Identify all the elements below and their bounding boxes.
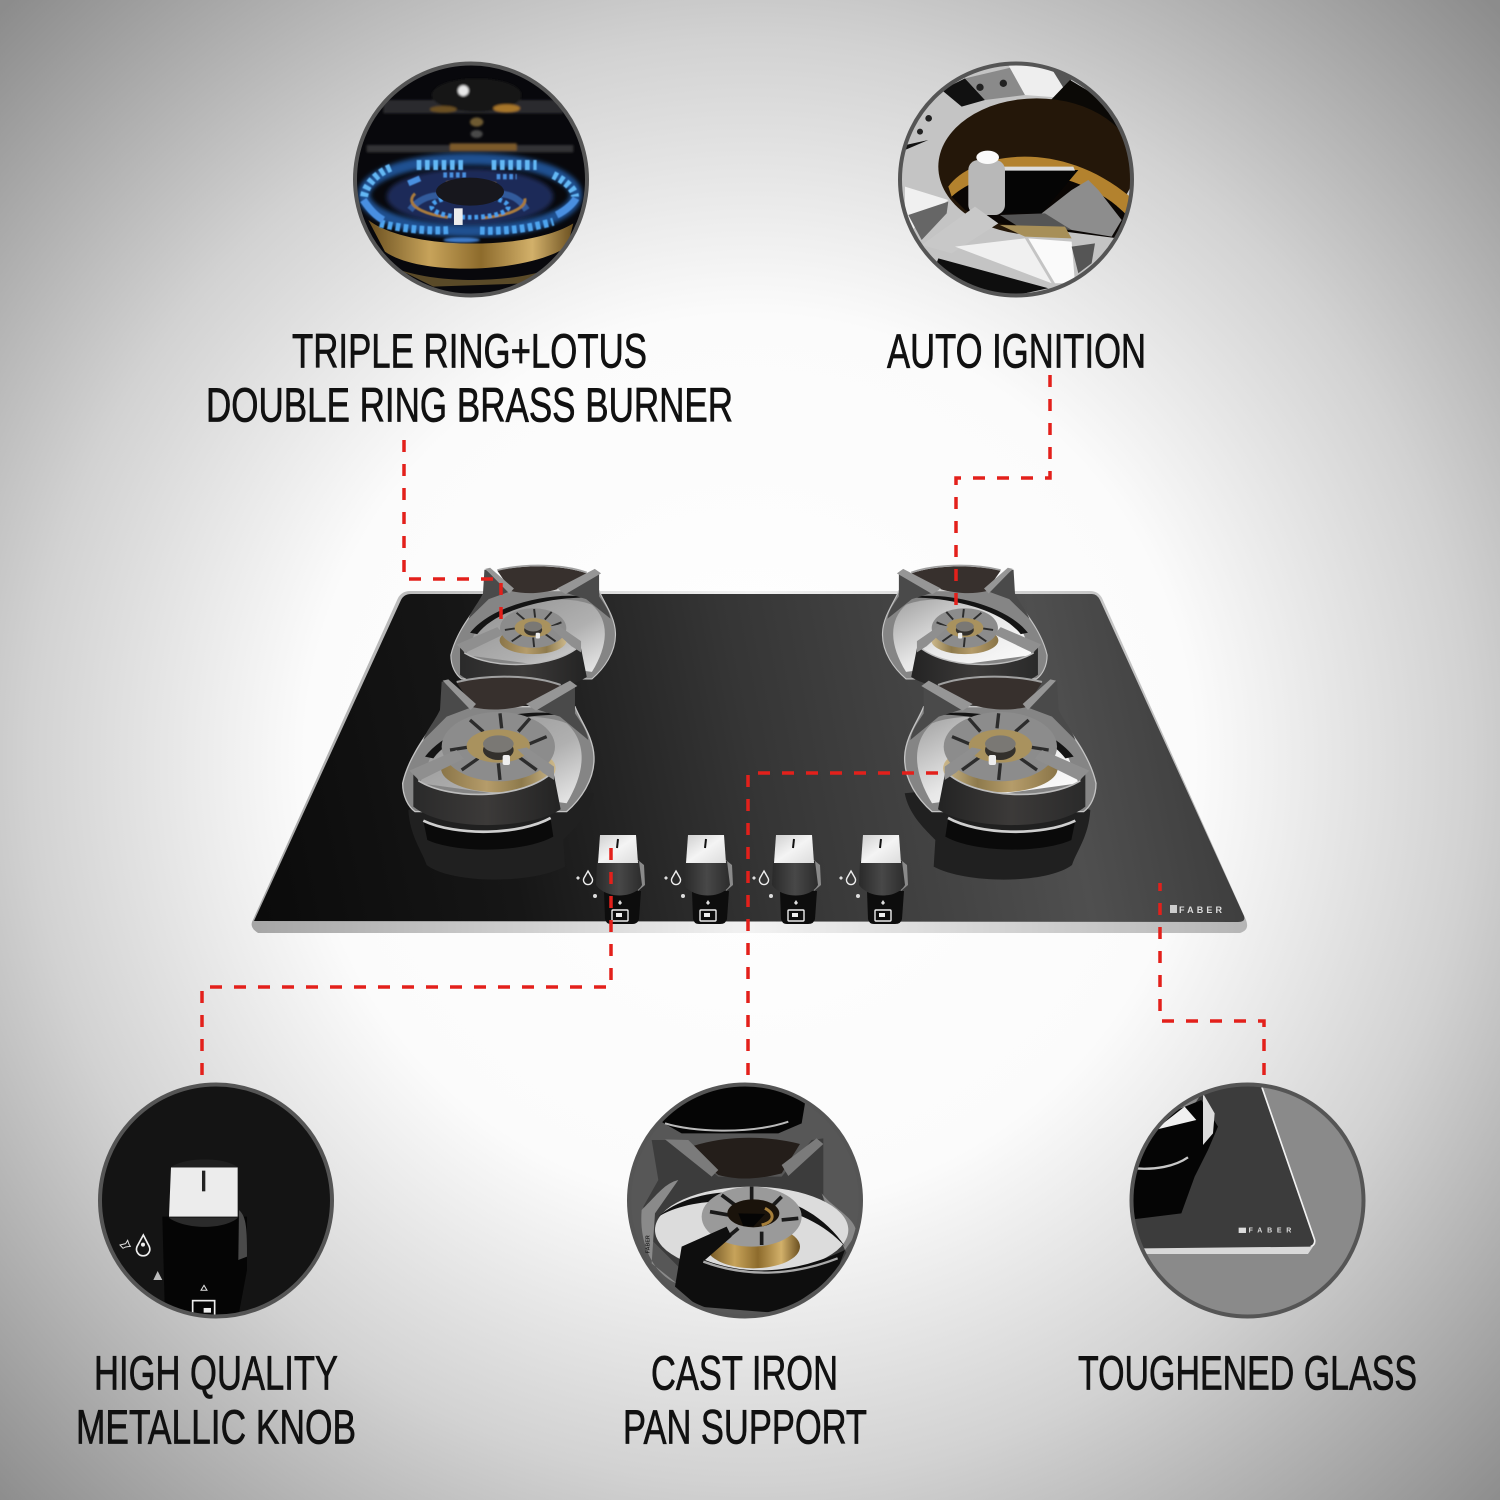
heading: burner [206,326,733,432]
connector: knob [202,845,611,1075]
connector: auto ignition [956,375,1050,612]
burner: bottom left [403,677,594,880]
heading: burner: DOUBLE RING BRASS BURNER [206,380,733,432]
hob [252,566,1247,933]
heading: pan support [623,1348,867,1454]
heading: burner: TRIPLE RING+LOTUS [292,326,647,378]
feature: toughened glass photo: FABER [1249,1228,1291,1235]
connector: brass burner [404,440,501,630]
connector: glass [1160,883,1264,1075]
feature: pan support photo: FABER [645,1235,651,1253]
heading: knob: HIGH QUALITY [94,1348,338,1400]
feature: toughened glass photo [1125,1080,1368,1320]
heading: knob: METALLIC KNOB [76,1402,356,1454]
heading: auto ignition: AUTO IGNITION [887,326,1146,378]
knob 1 [576,835,645,924]
heading: knob [76,1348,356,1454]
glass cooktop edge [252,591,1247,933]
feature: auto ignition photo [898,62,1134,298]
burner: top right [882,566,1047,690]
feature: pan support photo [625,1080,865,1320]
knob 4 [839,835,908,924]
connector: pan support [748,773,950,1075]
feature: knob photo [95,1080,335,1321]
heading: pan support: CAST IRON [651,1348,838,1400]
burner: bottom right [905,677,1096,880]
feature: flame burner photo [353,62,589,298]
burner: top left [451,566,615,690]
logo: FABER [1179,905,1222,915]
heading: pan support: PAN SUPPORT [623,1402,867,1454]
knob 2 [664,835,733,924]
knob 3 [752,835,821,924]
glass surface [254,594,1244,922]
